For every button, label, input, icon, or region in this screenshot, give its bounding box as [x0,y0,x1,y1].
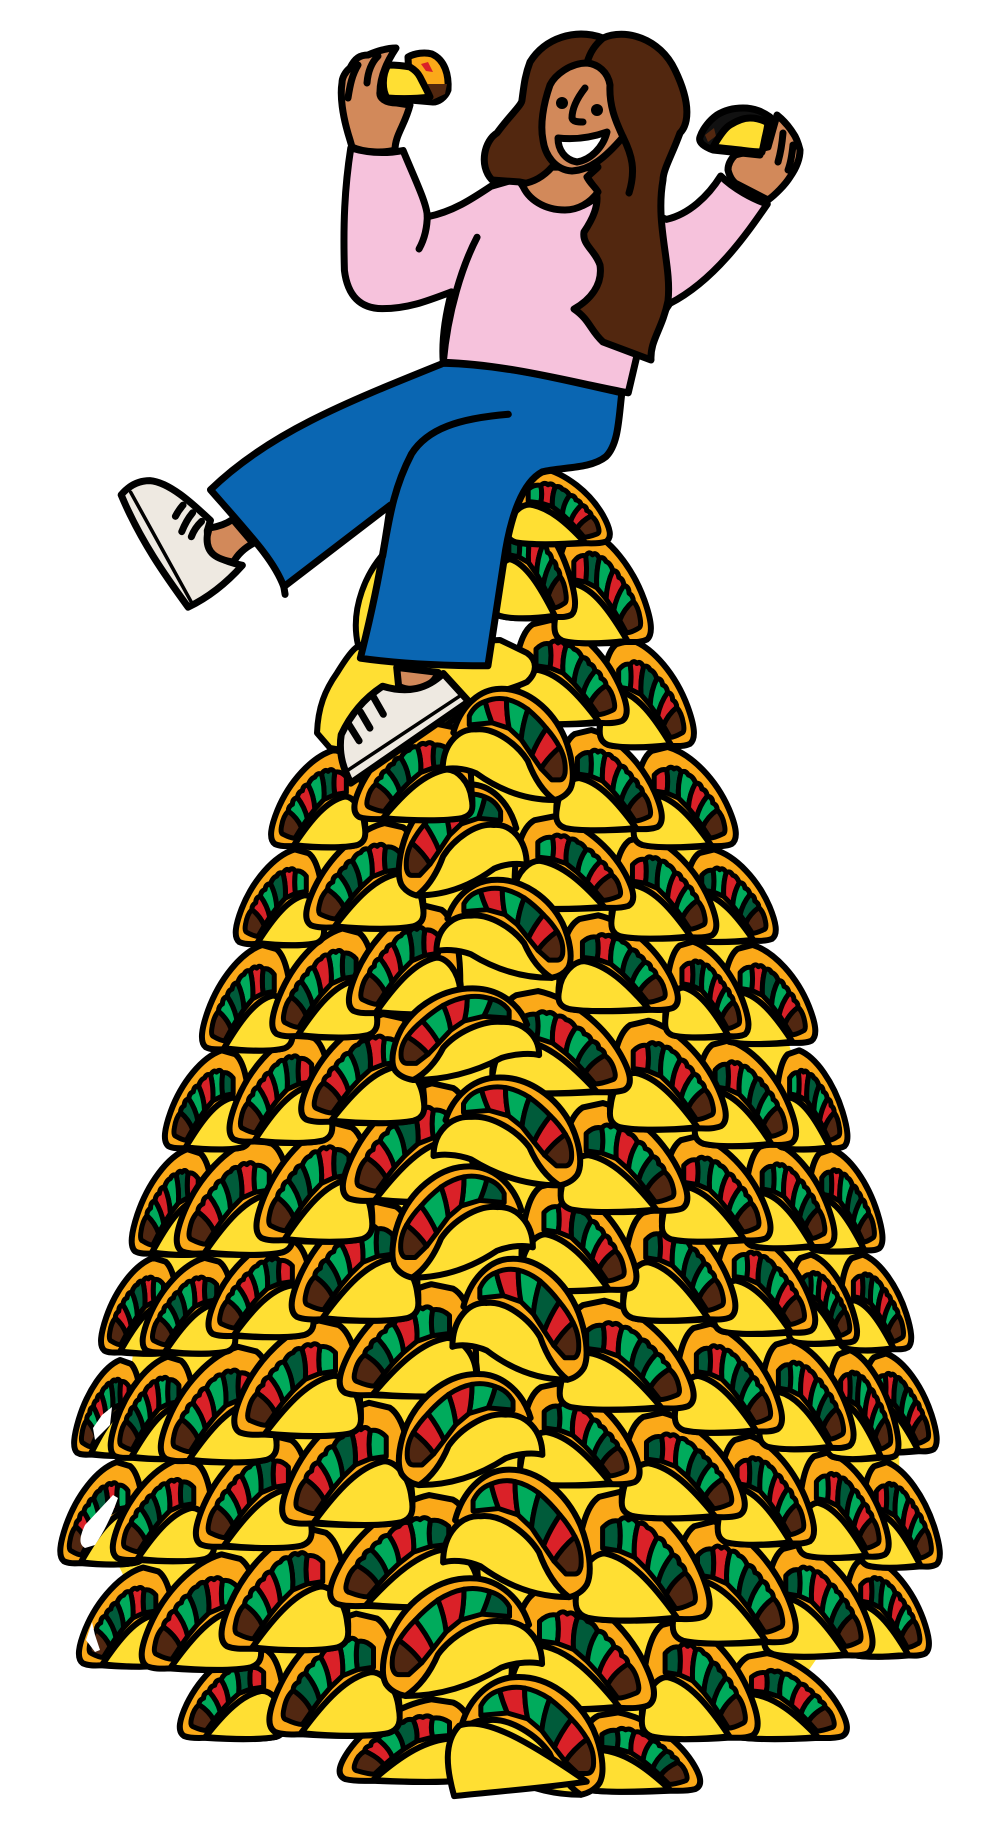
smile [558,132,607,162]
upper right tacos [492,468,736,847]
hair part line [587,38,603,63]
ankle [397,667,438,689]
sleeve fold [419,214,427,249]
taco shell back [700,108,770,155]
shoe upper [340,673,469,783]
shoe sole line [348,696,459,770]
taco shell front [383,65,430,99]
top central taco [443,689,573,800]
eyes [556,97,603,116]
sweater [344,148,767,393]
hair [484,34,687,360]
taco behind raised leg [356,545,400,645]
hand [341,48,410,152]
torso line [443,237,477,362]
lower body and sweater [121,148,767,783]
standing foot [340,667,469,783]
cuff tail [284,587,285,594]
central column tacos [383,784,602,1795]
unfilled gaps at left of pile [80,1407,118,1652]
ankle [207,519,253,562]
nose [572,88,585,122]
front taco shell [448,1724,587,1796]
raised-leg shoe [121,481,253,607]
right hand with taco [700,108,800,200]
left hand with taco [341,48,448,152]
fingers [348,56,378,98]
laces [175,505,202,537]
taco filling [421,62,433,72]
neck [522,167,598,210]
face [542,63,623,171]
outer tacos [60,816,940,1792]
taco shell front [713,118,768,152]
taco meat [424,84,447,100]
woman [121,34,800,783]
hand [728,115,800,200]
fingers [778,133,793,170]
taco pile [60,468,940,1796]
pile lower section [60,747,940,1796]
jeans fold line [383,414,508,556]
hair strand line [623,137,633,193]
shoe sole line [131,492,191,602]
pile base fill [108,747,899,1749]
taco meat [705,128,716,142]
jeans [210,363,622,666]
upper left tacos [271,723,472,847]
shoe upper [121,481,242,607]
laces [349,696,383,741]
pile upper section [271,468,736,847]
large yellow taco under foot [317,640,535,760]
taco shell back [408,53,448,102]
